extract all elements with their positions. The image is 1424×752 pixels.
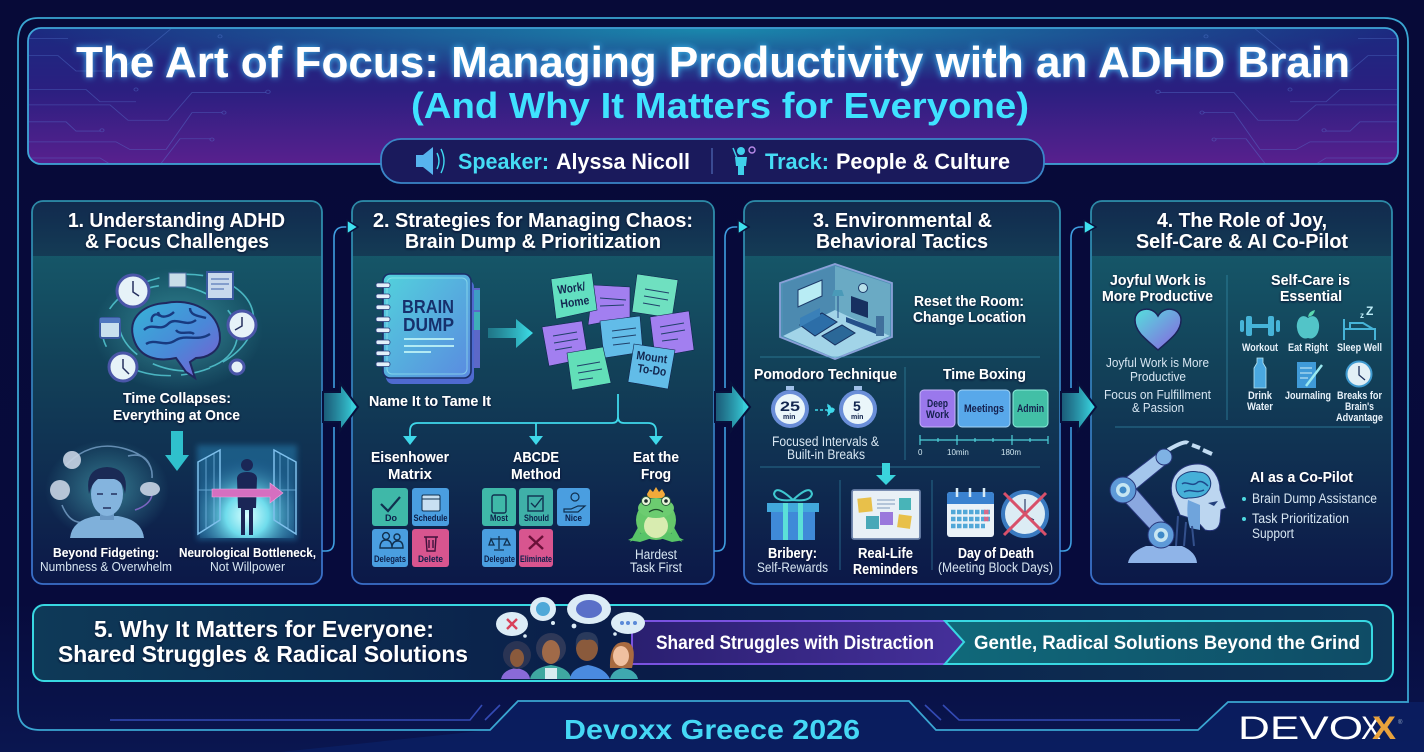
panel 4: joy, self-care and AI co-pilot bbox=[1091, 201, 1392, 584]
heading: joyful work bbox=[1102, 272, 1213, 305]
caption: neurological bottleneck bbox=[179, 545, 316, 574]
label: breaks: Advantage bbox=[1336, 412, 1383, 424]
icon: 25 minute timer: min bbox=[783, 414, 795, 421]
heading: abcde method: Method bbox=[511, 466, 561, 483]
label: eat right: Eat Right bbox=[1288, 342, 1328, 354]
panel 5: why it matters band bbox=[33, 594, 1393, 681]
heading: joyful work: More Productive bbox=[1102, 288, 1213, 305]
caption: name it to tame it: Name It to Tame It bbox=[369, 393, 491, 410]
devoxx logo: DEVO bbox=[1238, 710, 1363, 746]
caption: neurological bottleneck: Not Willpower bbox=[210, 560, 285, 574]
abcde boxes: Should bbox=[524, 513, 549, 523]
icon: crossed clock bbox=[1003, 492, 1047, 536]
chevron: gentle radical solutions: Gentle, Radical Solutions Beyond the Grind bbox=[974, 633, 1360, 654]
icon: 25 minute timer bbox=[771, 386, 809, 428]
chevron: shared struggles bbox=[632, 621, 964, 664]
caption: hardest task first bbox=[630, 547, 682, 575]
caption: beyond fidgeting: Numbness & Overwhelm bbox=[40, 560, 172, 574]
heading: & Focus Challenges bbox=[85, 231, 269, 253]
heading: eat the frog bbox=[633, 449, 679, 483]
devoxx logo: X bbox=[1361, 710, 1381, 746]
caption: time collapses: Time Collapses: bbox=[123, 390, 231, 407]
label: journaling: Journaling bbox=[1285, 390, 1331, 402]
label: workout: Workout bbox=[1242, 342, 1278, 354]
heading bbox=[1136, 210, 1348, 253]
timeline: 10min bbox=[947, 448, 969, 457]
caption: reset the room: Change Location bbox=[913, 309, 1026, 326]
devoxx logo bbox=[1238, 710, 1403, 746]
heading bbox=[373, 210, 693, 253]
label: breaks bbox=[1336, 390, 1383, 424]
documents bbox=[100, 272, 233, 338]
person 1 bbox=[501, 641, 531, 679]
icon: whiteboard bbox=[852, 490, 920, 539]
heading: eisenhower matrix bbox=[371, 449, 449, 483]
icon: gift bbox=[767, 490, 819, 540]
footer ribbon bbox=[110, 701, 1424, 752]
caption: focused intervals: Built-in Breaks bbox=[787, 447, 865, 462]
abcde boxes: Delegate bbox=[484, 554, 515, 564]
timeline bbox=[918, 435, 1048, 457]
icon: bed: Z bbox=[1366, 304, 1373, 318]
icon: bed: z bbox=[1360, 311, 1364, 320]
icon: 5 minute timer: min bbox=[851, 414, 863, 421]
caption: time collapses bbox=[113, 390, 240, 424]
icon: presenter bbox=[733, 147, 755, 175]
chevron: gentle radical solutions bbox=[945, 621, 1372, 664]
icon: bed bbox=[1344, 304, 1375, 340]
caption: day of death: Day of Death bbox=[958, 545, 1034, 562]
title: The Art of Focus: Managing Productivity with an ADHD Brain bbox=[76, 38, 1350, 87]
arrow: connector 1 to 2 bbox=[322, 220, 358, 551]
label: drink water bbox=[1247, 390, 1274, 413]
note labels bbox=[556, 279, 668, 379]
bullet list bbox=[1242, 491, 1377, 541]
thought bubbles bbox=[496, 594, 645, 638]
time boxing blocks: Work bbox=[926, 409, 950, 421]
arrow: notebook to notes bbox=[488, 319, 533, 348]
timeline: 180m bbox=[1001, 448, 1021, 457]
caption: focused intervals bbox=[772, 434, 879, 462]
heading bbox=[813, 210, 992, 253]
panel 3: environmental and behavioral tactics bbox=[744, 201, 1060, 584]
heading: abcde method bbox=[511, 449, 561, 483]
person 3 bbox=[570, 632, 610, 679]
heading: eat the frog: Eat the bbox=[633, 449, 679, 466]
heading: time boxing: Time Boxing bbox=[943, 366, 1026, 383]
arrow: connector 2 to 3 bbox=[714, 220, 750, 551]
bullet list: Task Prioritization bbox=[1252, 511, 1349, 526]
eisenhower boxes: Do bbox=[385, 513, 397, 523]
label: breaks: Breaks for bbox=[1337, 390, 1383, 402]
heading: self-care: Self-Care is bbox=[1271, 272, 1350, 289]
icon: 25 minute timer: 25 bbox=[780, 398, 800, 414]
arrow: fork to three methods bbox=[403, 394, 663, 445]
timeline: 0 bbox=[918, 448, 923, 457]
eisenhower boxes: Delegats bbox=[374, 554, 406, 564]
arrow: down bbox=[165, 431, 189, 471]
devoxx logo: ® bbox=[1398, 719, 1403, 726]
icon: calendar bbox=[947, 488, 994, 537]
heading bbox=[68, 210, 285, 253]
caption: time collapses: Everything at Once bbox=[113, 407, 240, 424]
caption: bribery: Self-Rewards bbox=[757, 560, 828, 575]
label: sleep well: Sleep Well bbox=[1337, 342, 1382, 354]
icon: 5 minute timer bbox=[839, 386, 877, 428]
icon: brain dump notebook: BRAIN bbox=[402, 297, 454, 317]
caption: beyond fidgeting bbox=[40, 545, 172, 574]
eisenhower boxes: Schedule bbox=[414, 513, 448, 523]
illustration: corridor bottleneck bbox=[197, 445, 297, 540]
sticky notes bbox=[542, 273, 694, 390]
heading: abcde method: ABCDE bbox=[513, 449, 559, 466]
bullet list: Brain Dump Assistance bbox=[1252, 491, 1377, 506]
heading: Shared Struggles & Radical Solutions bbox=[58, 641, 468, 667]
caption: day of death bbox=[938, 545, 1053, 575]
icon: apple bbox=[1297, 310, 1319, 339]
text: joyful work description: Focus on Fulfillment bbox=[1104, 388, 1211, 402]
icon: water bottle bbox=[1254, 358, 1266, 388]
icon: brain dump notebook bbox=[376, 274, 480, 384]
icon: heart bbox=[1135, 309, 1181, 350]
heading bbox=[58, 616, 468, 667]
illustration: overwhelmed person bbox=[45, 440, 169, 540]
abcde boxes: Eliminate bbox=[520, 554, 552, 564]
text: joyful work description: Productive bbox=[1130, 370, 1186, 384]
heading: self-care bbox=[1271, 272, 1350, 305]
icon: crowned frog bbox=[628, 487, 684, 542]
heading: eisenhower matrix: Eisenhower bbox=[371, 449, 449, 466]
person 2 bbox=[530, 633, 571, 679]
person 4 bbox=[610, 642, 638, 679]
heading: 1. Understanding ADHD bbox=[68, 210, 285, 232]
icon: speaker bbox=[416, 147, 444, 175]
track label: Track: bbox=[765, 149, 829, 174]
illustration: isometric room bbox=[780, 264, 892, 359]
caption: focused intervals: Focused Intervals & bbox=[772, 434, 879, 449]
abcde boxes: Most bbox=[490, 513, 508, 523]
time boxing blocks: Meetings bbox=[964, 403, 1004, 415]
heading: 3. Environmental & bbox=[813, 210, 992, 232]
caption: day of death: (Meeting Block Days) bbox=[938, 560, 1053, 575]
caption: real-life reminders: Real-Life bbox=[858, 545, 913, 562]
eisenhower boxes: Delete bbox=[418, 554, 443, 564]
footer event name: Devoxx Greece 2026 bbox=[564, 714, 860, 745]
devoxx logo: X bbox=[1372, 710, 1397, 746]
time boxing blocks: Admin bbox=[1017, 403, 1044, 415]
bullet list: Support bbox=[1252, 526, 1294, 541]
heading: joyful work: Joyful Work is bbox=[1110, 272, 1206, 289]
icon: brain with swirling clocks bbox=[93, 265, 263, 392]
icon: brain dump notebook: DUMP bbox=[403, 315, 454, 335]
caption: reset the room: Reset the Room: bbox=[914, 293, 1024, 310]
icon: 5 minute timer: 5 bbox=[853, 398, 861, 414]
heading: 5. Why It Matters for Everyone: bbox=[94, 616, 434, 642]
label: drink water: Drink bbox=[1248, 390, 1273, 402]
chevron: shared struggles: Shared Struggles with Distraction bbox=[656, 633, 934, 654]
caption: beyond fidgeting: Beyond Fidgeting: bbox=[53, 545, 159, 560]
time boxing blocks bbox=[920, 390, 1048, 427]
caption: real-life reminders bbox=[853, 545, 918, 578]
speaker and track pill bbox=[381, 139, 1044, 183]
caption: real-life reminders: Reminders bbox=[853, 561, 918, 578]
heading: 2. Strategies for Managing Chaos: bbox=[373, 210, 693, 232]
arrow: dashed timer transition bbox=[815, 405, 835, 415]
heading: Behavioral Tactics bbox=[816, 231, 988, 253]
icon: journal bbox=[1297, 362, 1322, 388]
text: joyful work description: & Passion bbox=[1132, 401, 1184, 415]
note labels: Mount bbox=[636, 348, 668, 366]
heading: Self-Care & AI Co-Pilot bbox=[1136, 231, 1348, 253]
heading: ai as co-pilot: AI as a Co-Pilot bbox=[1250, 469, 1353, 486]
note labels: To-Do bbox=[637, 361, 667, 379]
icon: workout bbox=[1240, 316, 1280, 336]
text: joyful work description bbox=[1104, 356, 1211, 415]
arrow: connector 3 to 4 bbox=[1060, 220, 1096, 551]
speaker label: Speaker: bbox=[458, 149, 549, 174]
abcde boxes: Nice bbox=[565, 513, 582, 523]
icon: clock bbox=[1346, 362, 1372, 386]
caption: hardest task first: Task First bbox=[630, 560, 682, 575]
label: breaks: Brain's bbox=[1345, 401, 1374, 413]
time boxing blocks: Deep bbox=[927, 398, 948, 410]
caption: bribery: Bribery: bbox=[768, 545, 817, 562]
panel 2: strategies for managing chaos bbox=[352, 201, 714, 584]
caption: bribery bbox=[757, 545, 828, 575]
subtitle: (And Why It Matters for Everyone) bbox=[411, 85, 1029, 126]
track name: People & Culture bbox=[836, 149, 1010, 174]
heading: Brain Dump & Prioritization bbox=[405, 231, 661, 253]
illustration: four people with thought bubbles bbox=[496, 594, 645, 679]
eisenhower boxes bbox=[372, 488, 449, 567]
text: joyful work description: Joyful Work is More bbox=[1106, 356, 1209, 370]
brain bbox=[132, 302, 220, 378]
caption: reset the room bbox=[913, 293, 1026, 326]
clocks bbox=[109, 275, 256, 381]
caption: hardest task first: Hardest bbox=[635, 547, 677, 562]
note labels: Work/ bbox=[556, 279, 587, 297]
heading: pomodoro: Pomodoro Technique bbox=[754, 366, 897, 383]
speaker name: Alyssa Nicoll bbox=[556, 149, 690, 174]
heading: eat the frog: Frog bbox=[641, 466, 671, 483]
heading: 4. The Role of Joy, bbox=[1157, 210, 1327, 232]
illustration: robot ai co-pilot bbox=[1110, 442, 1226, 563]
arrow: down bbox=[876, 463, 896, 485]
header banner bbox=[28, 28, 1398, 173]
abcde boxes bbox=[482, 488, 590, 567]
panel 1: understanding ADHD bbox=[32, 201, 322, 584]
note labels: Home bbox=[559, 293, 590, 311]
heading: self-care: Essential bbox=[1280, 288, 1342, 305]
caption: neurological bottleneck: Neurological Bottleneck, bbox=[179, 545, 316, 560]
label: drink water: Water bbox=[1247, 401, 1274, 413]
heading: eisenhower matrix: Matrix bbox=[388, 466, 433, 483]
